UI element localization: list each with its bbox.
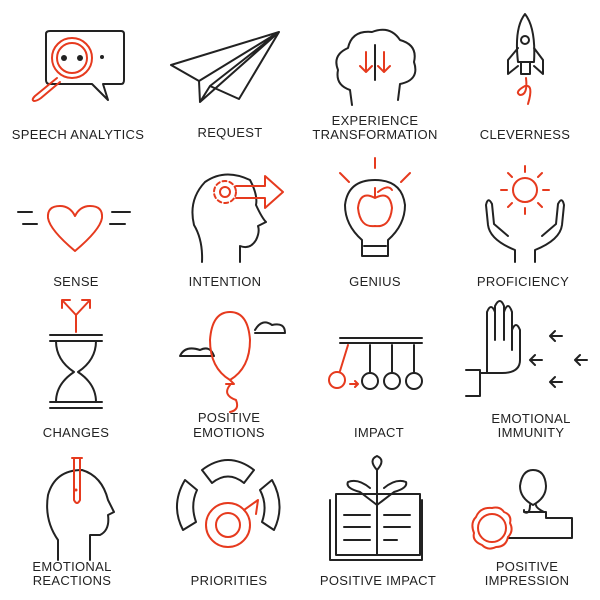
label: cleverness: CLEVERNESS — [480, 127, 570, 142]
icon: speech analytics — [33, 31, 124, 101]
label line 2: IMMUNITY — [498, 425, 564, 440]
icon: emotional reactions head — [47, 458, 114, 560]
icon: positive impact book — [330, 456, 422, 560]
label: emotional reactions: EMOTIONAL — [32, 559, 112, 574]
icon: intention head — [192, 174, 283, 262]
icon: emotional immunity hand — [466, 301, 587, 396]
label: sense: SENSE — [53, 274, 99, 289]
label: priorities: PRIORITIES — [191, 573, 267, 588]
label: positive impression: POSITIVE — [496, 559, 558, 574]
label: changes: CHANGES — [43, 425, 109, 440]
label: positive emotions: POSITIVE — [198, 410, 260, 425]
label: experience transformation: EXPERIENCE — [332, 113, 418, 128]
icon: positive emotions balloon — [180, 312, 285, 412]
icon: priorities gauge — [177, 460, 280, 547]
label: intention: INTENTION — [189, 274, 261, 289]
label line 2: IMPRESSION — [485, 573, 569, 588]
icon: positive impression stamp — [472, 470, 572, 549]
icon: genius bulb — [340, 158, 410, 256]
label: proficiency: PROFICIENCY — [477, 274, 569, 289]
icon: experience transformation brain — [336, 30, 415, 105]
label line 2: REACTIONS — [33, 573, 111, 588]
label: request: REQUEST — [198, 125, 262, 140]
label: emotional immunity: EMOTIONAL — [491, 411, 571, 426]
icon: sense heart — [18, 206, 130, 251]
label: speech analytics: SPEECH ANALYTICS — [12, 127, 144, 142]
label line 2: TRANSFORMATION — [312, 127, 438, 142]
icon: cleverness rocket — [508, 14, 543, 104]
label: positive impact: POSITIVE IMPACT — [320, 573, 436, 588]
label: genius: GENIUS — [349, 274, 401, 289]
icon: request paper plane — [171, 32, 279, 102]
label line 2: EMOTIONS — [193, 425, 265, 440]
icon: impact newton cradle — [329, 338, 422, 389]
label: impact: IMPACT — [354, 425, 404, 440]
icon: changes hourglass — [50, 300, 102, 408]
icon: proficiency hands sun — [486, 166, 564, 262]
